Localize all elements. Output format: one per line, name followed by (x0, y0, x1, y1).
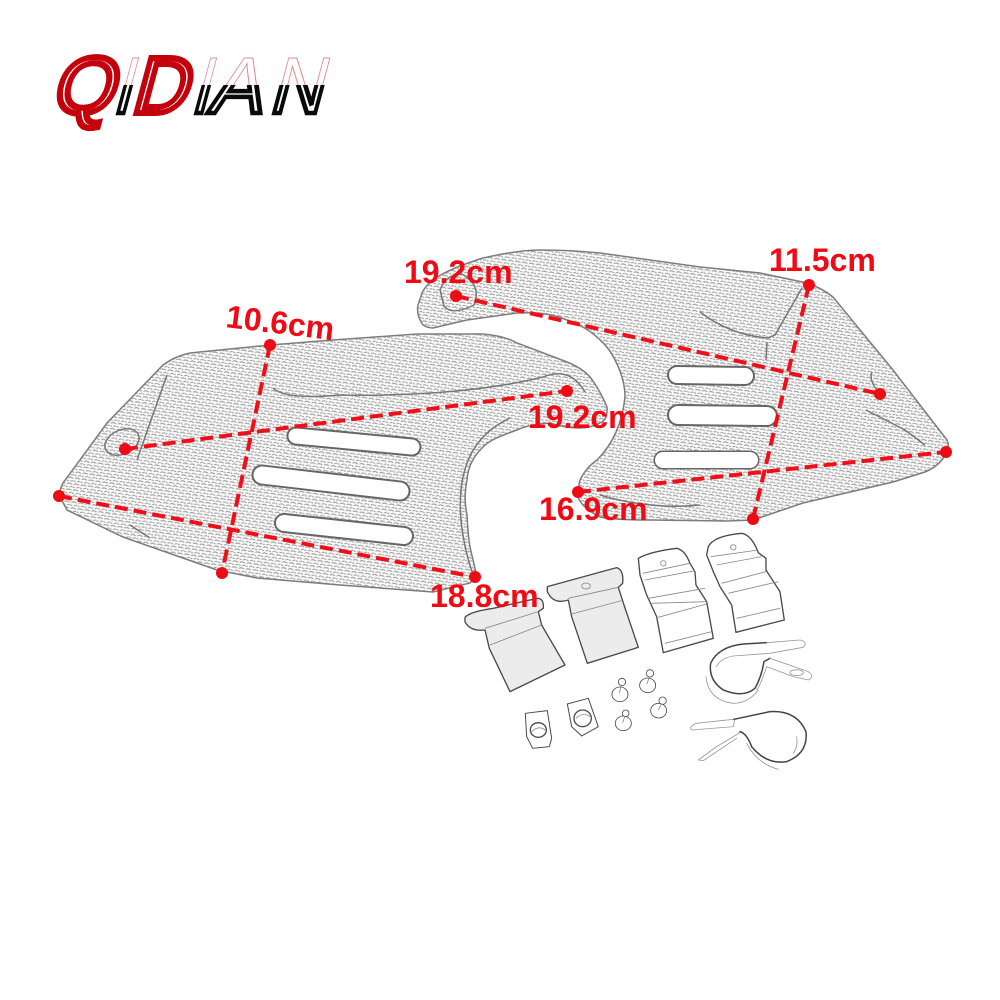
mounting hardware kit (465, 533, 812, 769)
logo letters lower half black: I (107, 41, 149, 130)
left panel outline (60, 334, 607, 592)
clip nut 2 (567, 698, 598, 736)
logo: QiDIAN (56, 54, 330, 132)
bracket 1 (465, 598, 565, 692)
logo letters Q and D: D (125, 41, 205, 130)
bracket 3 (638, 548, 713, 653)
dimension lines (59, 285, 946, 577)
logo letters lower half black: A (202, 41, 280, 131)
logo letters upper half outline: I (185, 41, 227, 130)
logo letters Q and D: Q (45, 41, 131, 131)
logo letters upper half outline (125, 58, 330, 85)
left panel lower length line (59, 496, 475, 577)
right panel vent slots (663, 375, 767, 460)
logo letters lower half black (116, 85, 325, 116)
left panel mounting hole and fold lines (101, 374, 585, 572)
left panel vent slots (262, 436, 412, 536)
screws (612, 670, 667, 731)
clamp 1 (706, 640, 812, 703)
label: 16.9cm: 16.9cm (539, 491, 648, 527)
label: 11.5cm: 11.5cm (769, 242, 876, 278)
label: 10.6cm: 10.6cm (224, 298, 336, 347)
left panel width line (222, 345, 270, 573)
logo letters upper half outline: A (202, 41, 280, 131)
bracket 4 (707, 533, 784, 632)
right panel width line (753, 285, 809, 519)
logo letters upper half outline: I (107, 41, 149, 130)
label: 19.2cm right panel: 19.2cm (404, 254, 513, 290)
label: 18.8cm: 18.8cm (430, 578, 539, 614)
right panel outline (418, 250, 948, 521)
logo letters upper half outline: N (263, 41, 341, 130)
right panel lower length line (578, 452, 946, 492)
bracket 2 (547, 568, 638, 663)
logo letters Q and D (45, 41, 205, 131)
right panel fold lines (440, 274, 925, 506)
logo letters lower half black: I (185, 41, 227, 130)
panel: left carbon heat shield (60, 334, 607, 592)
clamp 2 (691, 712, 806, 769)
right panel upper length line (456, 296, 880, 394)
panel: right carbon heat shield (418, 250, 948, 521)
label: 19.2cm left panel: 19.2cm (528, 399, 637, 435)
clip nut 1 (525, 711, 552, 748)
measurement points (53, 279, 952, 583)
logo letters lower half black: N (263, 41, 341, 130)
left panel upper length line (125, 391, 567, 449)
